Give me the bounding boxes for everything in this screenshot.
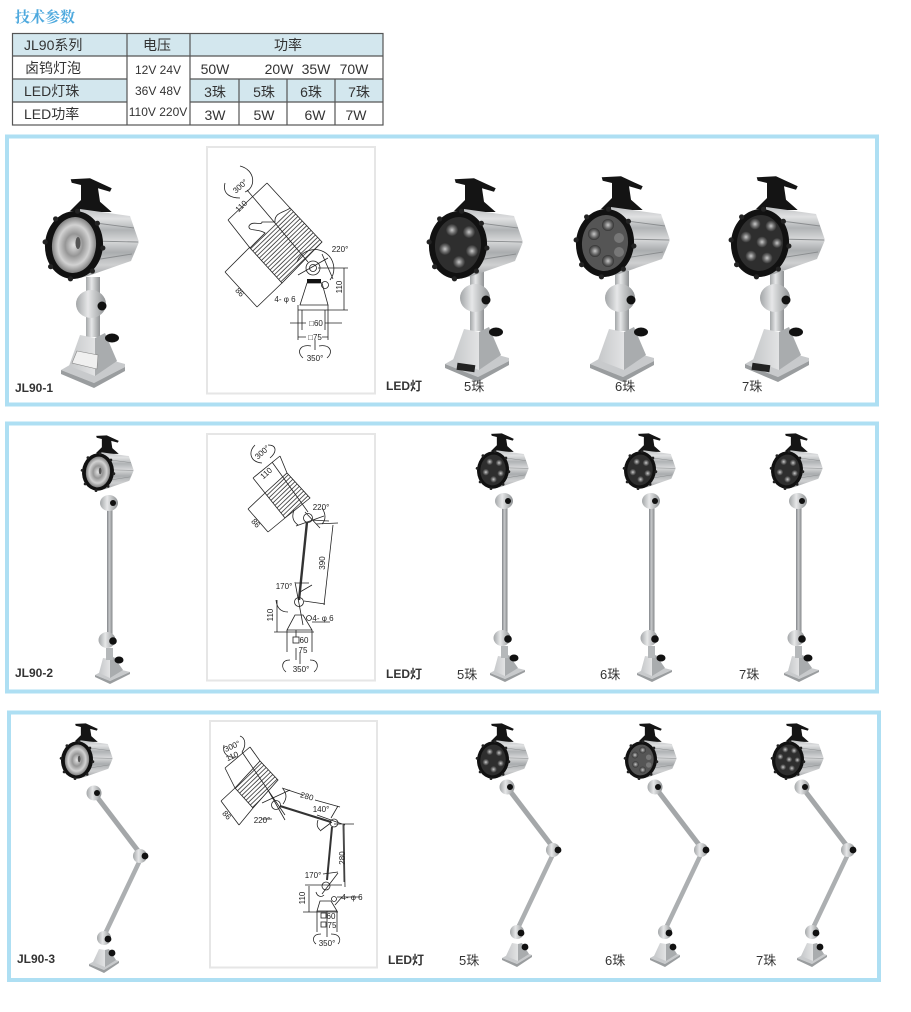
lamp photo: JL90-3 [58, 723, 148, 973]
technical drawing 3: 86 [220, 809, 233, 822]
label 5珠: 5珠 [459, 953, 479, 968]
lamp photo: LED 5 beads [474, 433, 529, 682]
specification table: 3珠 [204, 84, 226, 100]
lamp photo: LED 6 beads [622, 723, 709, 967]
technical drawing 3: 110 [298, 891, 307, 904]
specification table [12, 33, 383, 125]
specification table: 7珠 [348, 84, 370, 100]
technical drawing 2: 60 [300, 636, 309, 645]
label 6珠: 6珠 [600, 667, 620, 682]
title: 技术参数 [15, 8, 75, 26]
technical drawing 2: 86 [249, 517, 262, 530]
label LED灯: LED灯 [386, 379, 422, 393]
label 7珠: 7珠 [742, 379, 762, 394]
lamp photo: LED 7 beads [768, 433, 823, 682]
technical drawing 1: 110 [335, 280, 344, 293]
specification table: 卤钨灯泡 [25, 60, 81, 76]
specification table: 6珠 [300, 84, 322, 100]
panel 2 border [7, 424, 877, 692]
label 5珠: 5珠 [464, 379, 484, 394]
technical drawing 2: 170° [276, 582, 292, 591]
model label JL90-3: JL90-3 [17, 952, 55, 966]
technical drawing 3: 4- φ 6 [341, 893, 363, 902]
technical drawing 2: 110 [266, 608, 275, 621]
technical drawing 2: 220° [313, 503, 329, 512]
technical drawing 2 [248, 443, 338, 674]
specification table: LED灯珠 [24, 83, 79, 99]
lamp photo: LED 7 beads [769, 723, 856, 967]
technical drawing 1: 300° [231, 177, 249, 195]
lamp photo: LED 7 beads [725, 176, 825, 382]
technical drawing 2: 300° [253, 443, 271, 461]
lamp photo: LED 5 beads [423, 178, 523, 382]
technical drawing 3: 300° [223, 739, 242, 754]
specification table: 电压 [143, 37, 171, 53]
panel 1 border [7, 136, 877, 404]
technical drawing 3: 60 [327, 912, 336, 921]
technical drawing 1: 350° [307, 354, 323, 363]
technical drawing 1: □60 [309, 319, 323, 328]
technical drawing 3: 350° [319, 939, 335, 948]
lamp photo: LED 5 beads [474, 723, 561, 967]
technical drawing 3: 280 [338, 851, 347, 865]
label LED灯: LED灯 [388, 953, 424, 967]
technical drawing 2: 350° [293, 665, 309, 674]
specification table: 35W [302, 61, 331, 77]
lamp photo: JL90-1 [39, 178, 139, 388]
specification table: 3W [204, 107, 226, 123]
technical drawing 1: □75 [308, 333, 322, 342]
technical drawing 1: 110 [234, 198, 249, 214]
specification table: 5W [254, 107, 275, 123]
panel: JL90-1 [7, 136, 877, 404]
technical drawing 1 [224, 166, 348, 363]
lamp photo: JL90-2 [79, 435, 134, 684]
technical drawing 3: 140° [313, 805, 329, 814]
technical drawing 2: 4- φ 6 [312, 614, 334, 623]
specification table: 功率 [274, 37, 302, 53]
technical drawing 3 [220, 736, 363, 948]
technical drawing 1: 86 [233, 286, 246, 299]
specification table: LED功率 [24, 106, 79, 122]
model label JL90-1: JL90-1 [15, 381, 53, 395]
label 6珠: 6珠 [605, 953, 625, 968]
specification table: 20W [265, 61, 294, 77]
diagram frame 1 [207, 147, 375, 394]
specification table: 36V 48V [135, 84, 181, 98]
lamp photo: LED 6 beads [621, 433, 676, 682]
specification table: 12V 24V [135, 63, 181, 77]
label 5珠: 5珠 [457, 667, 477, 682]
lamp photo: LED 6 beads [570, 176, 670, 382]
technical drawing 1: 4- φ 6 [274, 295, 296, 304]
technical drawing 2: 75 [299, 646, 308, 655]
technical drawing 3: 110 [225, 750, 240, 763]
specification table: 50W [201, 61, 230, 77]
label 7珠: 7珠 [739, 667, 759, 682]
technical drawing 1: 220° [332, 245, 348, 254]
specification table: 70W [340, 61, 369, 77]
panel 3 border [9, 712, 879, 980]
label LED灯: LED灯 [386, 667, 422, 681]
specification table: JL90系列 [24, 37, 82, 53]
label 7珠: 7珠 [756, 953, 776, 968]
technical drawing 3: 280 [299, 790, 315, 803]
panel: JL90-2 [7, 424, 877, 692]
technical drawing 3: 75 [328, 921, 337, 930]
diagram frame 2 [207, 434, 375, 680]
specification table: 110V 220V [129, 105, 187, 119]
specification table: 7W [346, 107, 367, 123]
specification table: 6W [304, 107, 326, 123]
technical drawing 2: 110 [259, 465, 274, 481]
specification table: 5珠 [253, 84, 275, 100]
technical drawing 3: 170° [305, 871, 321, 880]
panel: JL90-3 [9, 712, 879, 980]
model label JL90-2: JL90-2 [15, 666, 53, 680]
diagram frame 3 [210, 721, 377, 968]
technical drawing 2: 390 [318, 556, 327, 570]
technical drawing 3: 220° [254, 816, 270, 825]
label 6珠: 6珠 [615, 379, 635, 394]
